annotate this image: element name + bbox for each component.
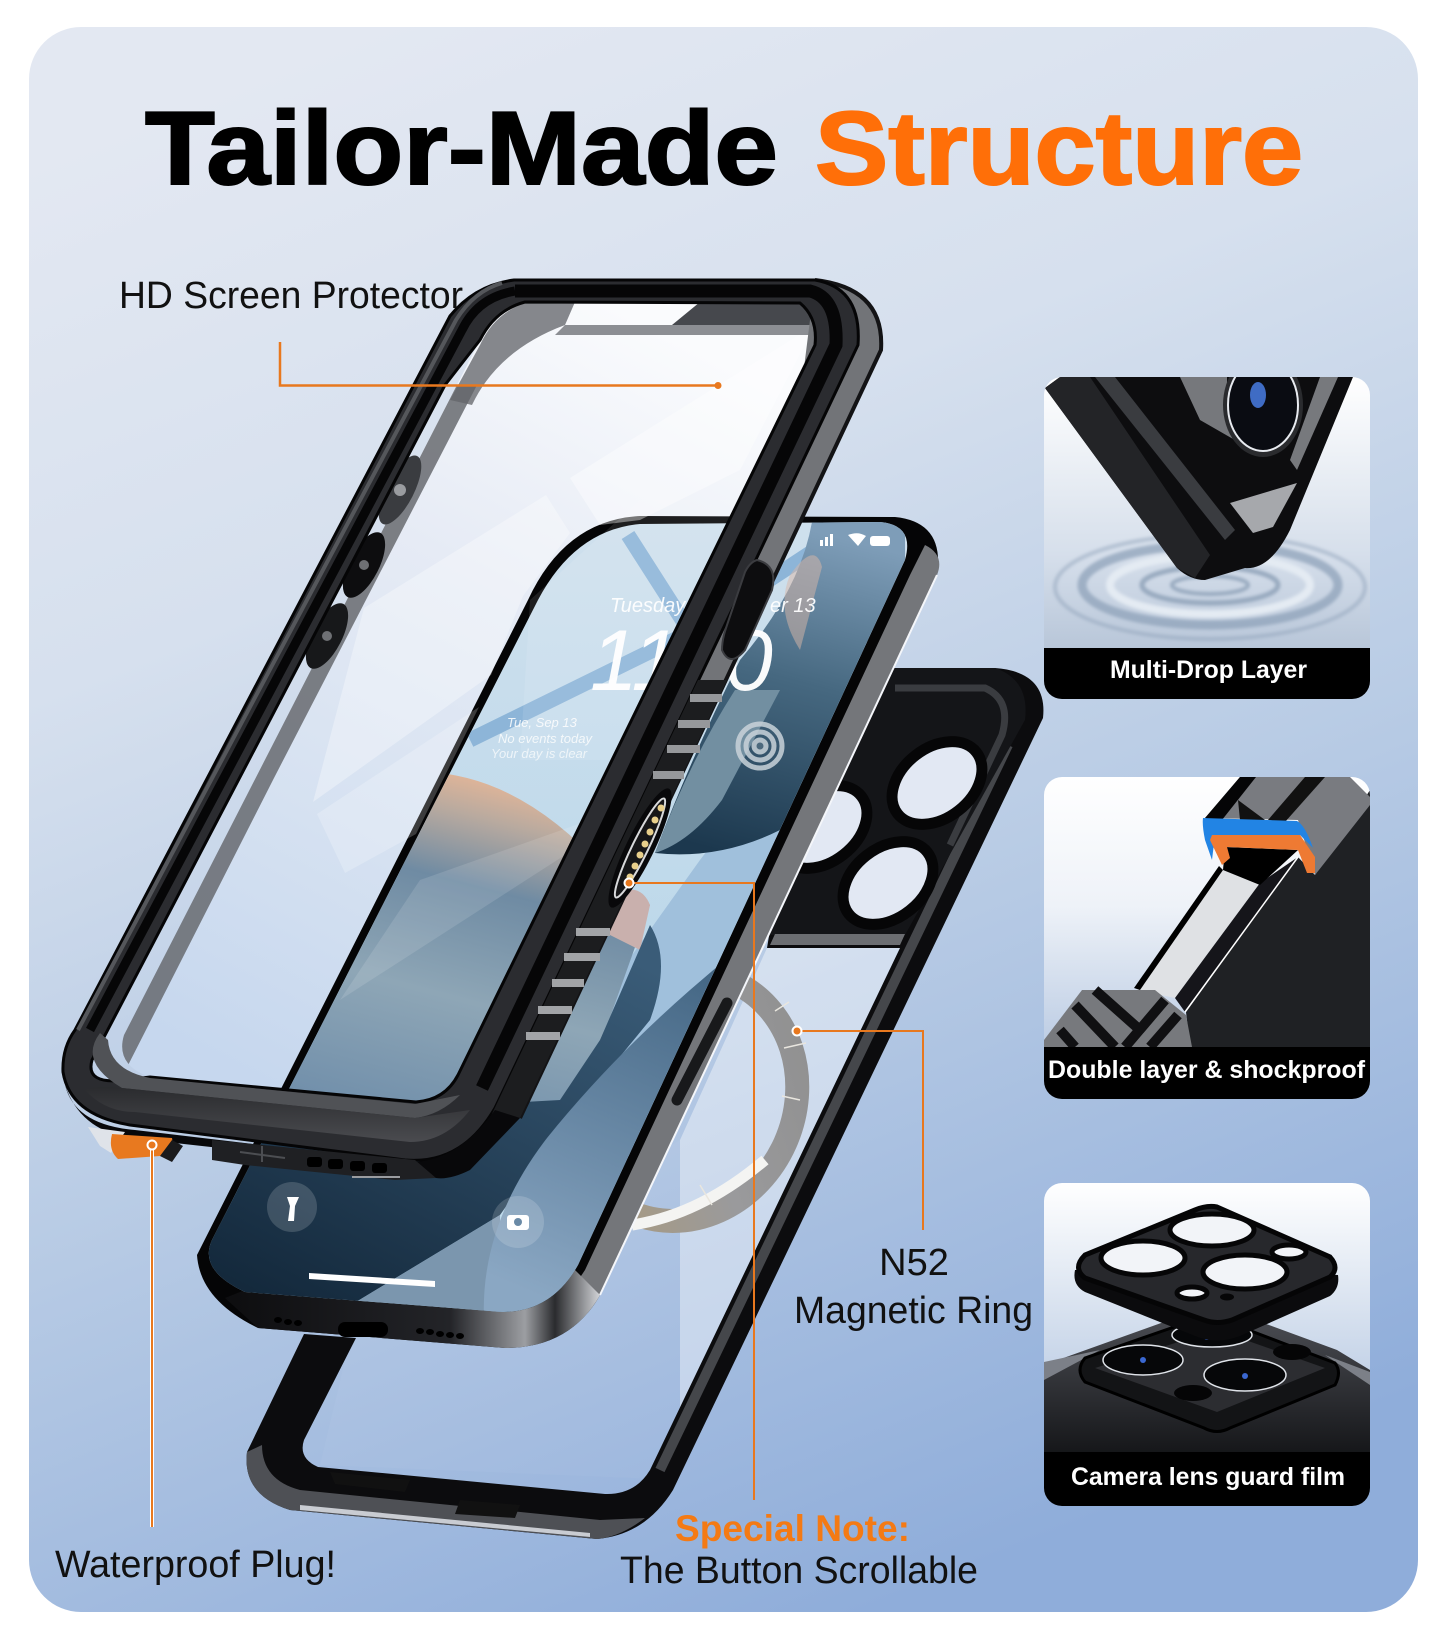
side button xyxy=(677,1003,727,1100)
dark disc xyxy=(655,522,905,854)
camera block xyxy=(770,668,1026,935)
caption: Multi-Drop Layer xyxy=(1110,656,1307,684)
window bars xyxy=(470,535,830,740)
lower camera island xyxy=(1080,1318,1338,1432)
waterproof plug xyxy=(88,1127,183,1162)
lock screen wallpaper xyxy=(190,510,930,1330)
peach and textured land xyxy=(289,774,650,1102)
lens xyxy=(1223,377,1303,457)
USB flap xyxy=(212,1140,436,1180)
lower frame lip xyxy=(65,1085,520,1178)
callout: button scrollable xyxy=(620,878,978,1592)
lens holes xyxy=(761,725,998,941)
title xyxy=(145,91,1303,207)
phone xyxy=(190,510,939,1348)
activity ring widget xyxy=(738,724,782,768)
lock screen text: 11: xyxy=(590,613,703,709)
bottom lip with ports xyxy=(225,1270,600,1348)
back case with camera cut-outs xyxy=(247,668,1043,1539)
caption: Camera lens guard film xyxy=(1071,1463,1345,1491)
callout: waterproof plug xyxy=(55,1140,336,1586)
water ripples xyxy=(1055,535,1365,639)
glass pane of the front frame xyxy=(122,302,815,1102)
upper ribs xyxy=(653,698,722,775)
phone back xyxy=(1044,1318,1370,1452)
raised lens guard xyxy=(1074,1270,1338,1340)
magnetic ring xyxy=(528,936,836,1258)
charging port xyxy=(598,783,682,913)
lock screen text: Tuesday, xyxy=(610,595,689,617)
side rail detail xyxy=(660,745,1008,1470)
left gasket xyxy=(122,386,476,1064)
home bar xyxy=(309,1273,435,1287)
glass reflections xyxy=(92,302,815,1085)
callout: magnetic ring: Magnetic Ring xyxy=(794,1290,1033,1332)
ribbed bumper xyxy=(1044,990,1192,1047)
callout: magnetic ring xyxy=(792,1026,1033,1332)
flashlight button xyxy=(267,1182,317,1232)
frame ring xyxy=(63,280,858,1160)
phone body xyxy=(197,516,938,1348)
lock screen text: 0 xyxy=(725,613,773,709)
frame black rail xyxy=(482,291,836,1088)
panel: double layer and shockproof xyxy=(1044,777,1370,1099)
slate triangle xyxy=(356,1215,500,1320)
camera button xyxy=(492,1196,544,1248)
phone side wall xyxy=(535,545,939,1345)
dark back surface xyxy=(1186,790,1370,1047)
bottom band gloss xyxy=(93,1033,460,1118)
callout: magnetic ring: N52 xyxy=(879,1242,949,1284)
dark rib zone xyxy=(490,680,727,1118)
leaf overlay xyxy=(484,968,716,1312)
panel: multi-drop layer xyxy=(1044,353,1370,699)
title: Tailor-Made xyxy=(145,91,778,207)
callout: button scrollable: Special Note: xyxy=(675,1508,910,1549)
lower ribs xyxy=(526,932,610,1036)
callout: HD screen protector xyxy=(119,275,722,389)
front screen protector frame xyxy=(63,280,881,1180)
overlay on the screen top xyxy=(522,516,730,722)
panel: camera lens guard film xyxy=(1044,1183,1370,1506)
clear back panel xyxy=(655,948,900,1460)
title: Structure xyxy=(815,91,1303,207)
power button xyxy=(722,560,773,659)
callout: button scrollable: The Button Scrollable xyxy=(620,1550,978,1592)
gasket plugs xyxy=(297,450,430,675)
TPU strip xyxy=(1137,870,1260,998)
top corner tint xyxy=(450,302,575,405)
blue and orange layers xyxy=(1203,818,1313,860)
rear rail xyxy=(1205,777,1370,875)
side wall xyxy=(470,280,881,1135)
case corner xyxy=(1045,377,1353,580)
lock screen text: Your day is clear xyxy=(491,746,588,761)
lock screen text: er 13 xyxy=(770,595,816,617)
case frame xyxy=(247,668,1043,1539)
lock screen text: No events today xyxy=(498,731,593,746)
callout: waterproof plug: Waterproof Plug! xyxy=(55,1544,336,1586)
lock screen text: Tue, Sep 13 xyxy=(507,715,578,730)
caption: Double layer & shockproof xyxy=(1048,1056,1366,1084)
bottom bevel xyxy=(247,1445,645,1539)
callout: HD screen protector: HD Screen Protector xyxy=(119,275,463,317)
lock screen text xyxy=(491,595,816,761)
lower navy xyxy=(195,925,661,1320)
status bar icons xyxy=(820,533,890,546)
